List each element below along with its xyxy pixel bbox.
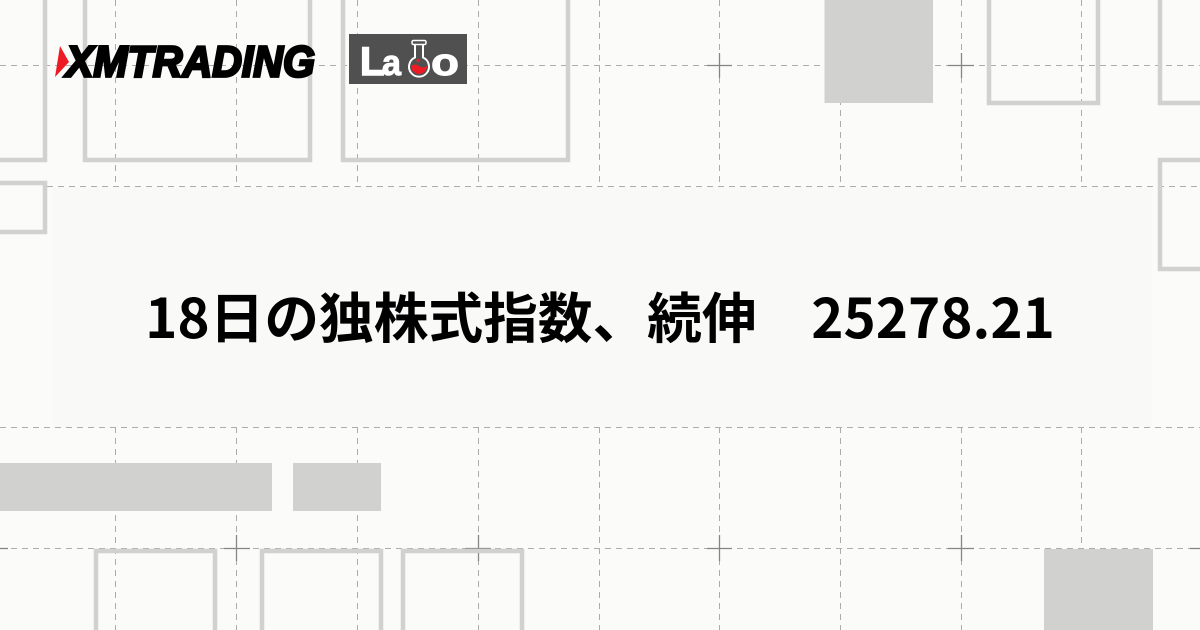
logo plate — [349, 34, 467, 84]
central title panel — [52, 187, 1152, 427]
logo: Labo — [349, 34, 467, 84]
logo: XMTRADING — [55, 38, 316, 86]
logo: Labo: a — [382, 42, 402, 83]
wordmark: XMTRADING — [63, 38, 315, 86]
icon: flask — [409, 40, 429, 77]
letters: L — [360, 40, 384, 84]
logo: Labo: o — [431, 42, 459, 84]
icon: red triangle — [55, 46, 69, 77]
title: 18日の独株式指数、続伸 25278.21 — [145, 275, 1055, 354]
